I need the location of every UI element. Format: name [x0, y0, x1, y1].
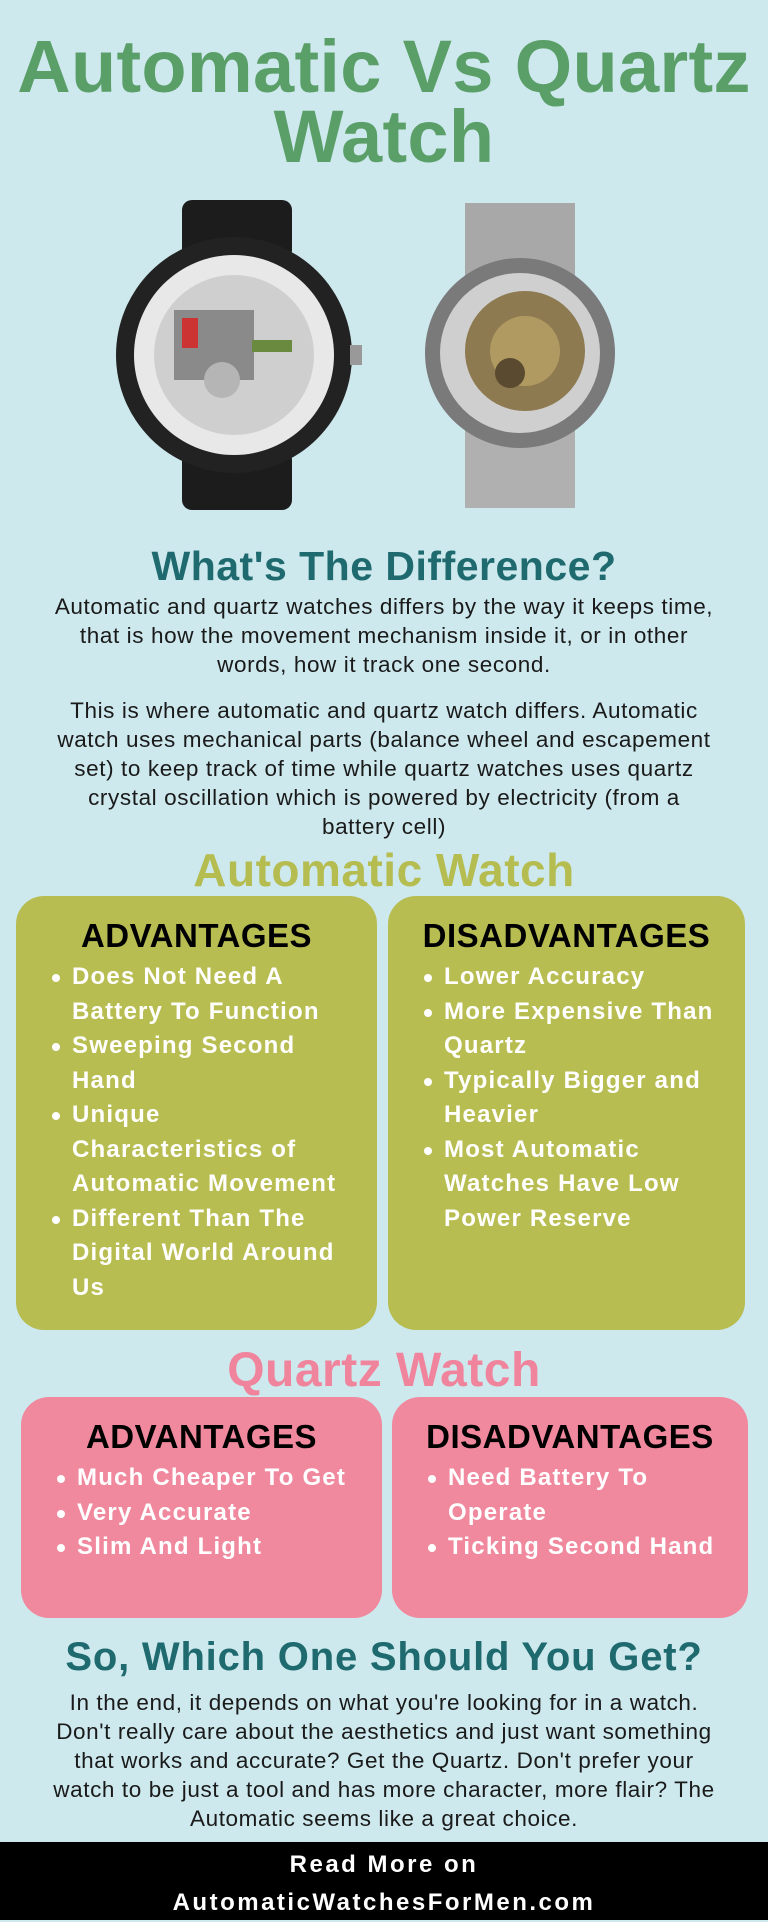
panel: quartz disadvantages	[392, 1397, 748, 1618]
panel: quartz disadvantages: Operate	[448, 1498, 547, 1526]
heading: difference: What's The Difference?	[152, 543, 616, 589]
text: difference paragraph 1: that is how the movement mechanism inside it, or in other	[80, 623, 688, 648]
panel: automatic advantages: Hand	[72, 1066, 137, 1094]
title	[17, 25, 751, 178]
panel: automatic disadvantages	[388, 896, 745, 1330]
panel: automatic advantages: Does Not Need A	[72, 963, 284, 990]
image: quartz watch	[116, 200, 362, 510]
panel: automatic advantages: Battery To Function	[72, 998, 320, 1024]
footer: AutomaticWatchesForMen.com	[173, 1889, 595, 1916]
text: conclusion: Don't really care about the aesthetics and just want something	[56, 1719, 712, 1744]
panel: automatic disadvantages: Watches Have Low	[444, 1170, 680, 1197]
text: difference paragraph 2: battery cell)	[322, 814, 446, 839]
panel: automatic advantages	[16, 896, 377, 1330]
panel: automatic advantages: ADVANTAGES	[81, 917, 312, 954]
text: conclusion: watch to be just a tool and has more character, more flair? The	[53, 1777, 715, 1802]
title: Automatic Vs Quartz	[17, 25, 751, 108]
text: conclusion	[53, 1690, 715, 1831]
panel: quartz disadvantages: DISADVANTAGES	[426, 1418, 714, 1455]
panel: quartz advantages	[21, 1397, 382, 1618]
panel: automatic disadvantages: Typically Bigger and	[444, 1066, 701, 1094]
panel: automatic advantages: Different Than The	[72, 1204, 306, 1232]
panel: automatic advantages: Unique	[72, 1101, 161, 1128]
panel: automatic disadvantages: Heavier	[444, 1101, 539, 1128]
text: conclusion: that works and accurate? Get the Quartz. Don't prefer your	[74, 1748, 694, 1773]
title: Watch	[274, 95, 494, 178]
panel: automatic disadvantages: Most Automatic	[444, 1136, 640, 1162]
panel: quartz disadvantages: Need Battery To	[448, 1464, 648, 1491]
text: conclusion: Automatic seems like a great choice.	[190, 1806, 578, 1831]
text: difference paragraph 1	[55, 594, 713, 677]
panel: automatic advantages: Characteristics of	[72, 1136, 296, 1162]
text: difference paragraph 1: words, how it track one second.	[217, 652, 551, 677]
footer	[0, 1842, 768, 1920]
panel: quartz advantages: Slim And Light	[77, 1533, 262, 1560]
text: conclusion: In the end, it depends on what you're looking for in a watch.	[70, 1690, 698, 1715]
panel: automatic advantages: Automatic Movement	[72, 1170, 336, 1197]
panel: quartz advantages: Very Accurate	[77, 1498, 252, 1526]
panel: automatic disadvantages: More Expensive Than	[444, 998, 714, 1024]
text: difference paragraph 2: watch uses mechanical parts (balance wheel and escapement	[57, 727, 711, 752]
panel: automatic disadvantages: Power Reserve	[444, 1204, 632, 1232]
panel: quartz disadvantages: Ticking Second Hand	[448, 1533, 714, 1560]
panel: automatic advantages: Us	[72, 1274, 105, 1300]
heading: which one: So, Which One Should You Get?	[65, 1635, 703, 1679]
footer: Read More on	[290, 1851, 478, 1878]
image: automatic watch	[425, 203, 615, 508]
heading: automatic watch: Automatic Watch	[193, 844, 575, 896]
panel: automatic disadvantages: Lower Accuracy	[444, 963, 645, 990]
panel: automatic advantages: Sweeping Second	[72, 1032, 295, 1059]
text: difference paragraph 2: This is where automatic and quartz watch differs. Automatic	[70, 698, 698, 723]
panel: automatic disadvantages: Quartz	[444, 1032, 527, 1059]
panel: quartz advantages: Much Cheaper To Get	[77, 1464, 346, 1491]
text: difference paragraph 1: Automatic and quartz watches differs by the way it keeps time,	[55, 594, 713, 619]
text: difference paragraph 2: set) to keep track of time while quartz watches uses quartz	[74, 756, 694, 781]
text: difference paragraph 2	[57, 698, 711, 839]
heading: quartz watch: Quartz Watch	[227, 1344, 541, 1397]
text: difference paragraph 2: crystal oscillation which is powered by electricity (from a	[88, 785, 680, 810]
panel: quartz advantages: ADVANTAGES	[86, 1418, 317, 1455]
panel: automatic disadvantages: DISADVANTAGES	[423, 917, 710, 954]
panel: automatic advantages: Digital World Around	[72, 1239, 335, 1266]
